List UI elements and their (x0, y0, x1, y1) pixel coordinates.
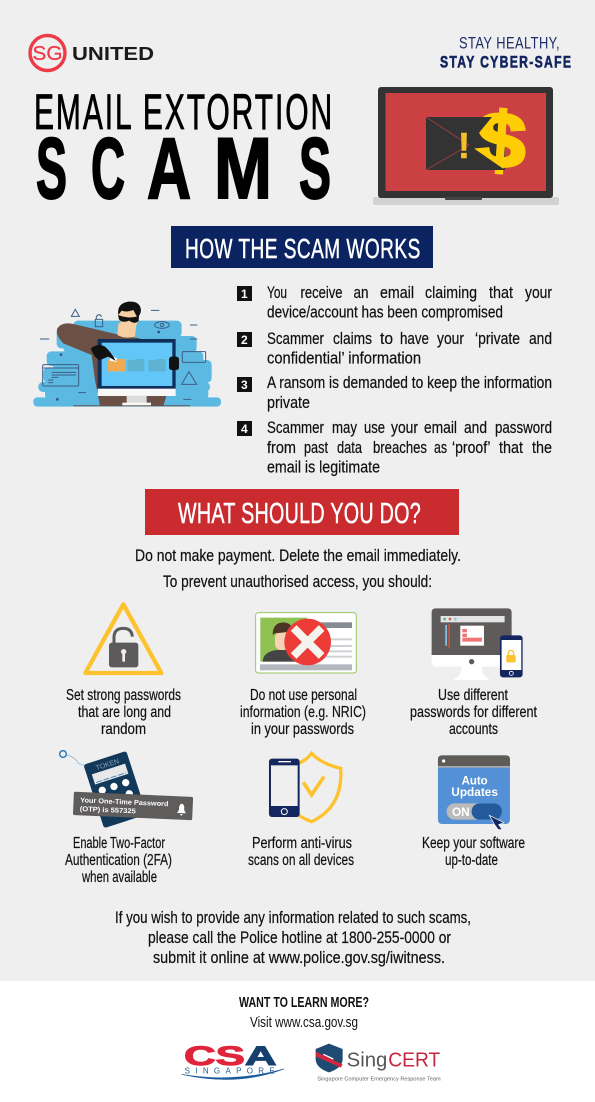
tip: different passwords: accounts (449, 721, 498, 738)
tip: no personal information: Do not use personal (250, 687, 357, 704)
step 2: and (529, 329, 552, 348)
title: EMAIL EXTORTION (34, 84, 332, 140)
logo: CSA Singapore: CS A (184, 1041, 277, 1071)
logo: SingCERT: CERT (388, 1048, 441, 1071)
step 1: claiming (425, 283, 477, 302)
step 2: ‘private (475, 329, 520, 348)
title: A (147, 121, 191, 217)
icon: token with OTP message: TOKEN (95, 758, 120, 772)
intro text: To prevent unauthorised access, you should: (163, 572, 432, 591)
footer text: WANT TO LEARN MORE? (239, 995, 369, 1011)
step 4: data (337, 438, 362, 457)
title: C (91, 121, 125, 217)
step 1: email (380, 283, 414, 302)
logo: CSA Singapore: SINGAPORE (185, 1067, 275, 1076)
step 4: password (495, 418, 552, 437)
tip: strong passwords: that are long and (78, 704, 171, 721)
tagline: STAY CYBER-SAFE (440, 54, 571, 72)
icon: token with OTP message (60, 751, 193, 828)
step 1 (237, 283, 552, 322)
step 1: You (267, 283, 287, 302)
title (34, 84, 332, 217)
step 2: confidential’ information (267, 348, 421, 368)
footer panel (0, 981, 595, 1102)
step 4: and (464, 418, 487, 437)
step 1: 1 (241, 287, 248, 301)
intro text: Do not make payment. Delete the email immediately. (135, 546, 461, 565)
step 1: receive (300, 283, 342, 302)
footer text (239, 995, 369, 1031)
icon: phone and shield (269, 753, 341, 822)
tip: software updates (422, 755, 525, 869)
step 1: device/account has been compromised (267, 302, 503, 322)
police hotline text (115, 908, 471, 967)
tip: no personal information: in your passwords (251, 721, 354, 738)
tip: software updates: Keep your software (422, 835, 525, 852)
tip: strong passwords: random (101, 721, 146, 738)
logo: SG United: UNITED (72, 44, 154, 64)
heading: what should you do: WHAT SHOULD YOU DO? (178, 498, 421, 530)
heading: how the scam works (171, 226, 433, 268)
tip: two-factor authentication (60, 751, 193, 886)
step 2: to (380, 329, 393, 348)
tip: strong passwords (66, 604, 181, 738)
step 4: email is legitimate (267, 458, 380, 476)
small floating icons (40, 309, 206, 399)
step 4: the (532, 438, 552, 457)
title: S (299, 121, 331, 217)
icon: laptop with ransom email (373, 87, 559, 205)
step 4: that (499, 438, 523, 457)
icon: ID card with red cross (256, 613, 356, 673)
step 4: Scammer (267, 418, 324, 437)
icon: token with OTP message: Your One-Time Password (80, 797, 169, 808)
tip: different passwords: passwords for different (410, 704, 538, 721)
steps list (237, 283, 552, 476)
icon: token with OTP message: (OTP) is 557325 (80, 806, 136, 815)
icon: auto updates toggle: ON (452, 805, 470, 819)
tip: no personal information: information (e.g. NRIC) (240, 704, 366, 721)
tip: no personal information (240, 613, 366, 738)
tip: two-factor authentication: when available (81, 869, 157, 886)
step 3 (237, 373, 552, 412)
tip: anti-virus: scans on all devices (248, 852, 354, 869)
tip: different passwords: Use different (438, 687, 509, 704)
tagline: STAY HEALTHY, (459, 35, 560, 53)
icon: monitor and phone (432, 608, 523, 680)
icon: auto updates toggle: Updates (451, 785, 498, 799)
step 2: claims (333, 329, 372, 348)
step 1: an (354, 283, 368, 302)
tip: different passwords (410, 608, 538, 738)
logo: SG United: SG (32, 43, 62, 65)
step 3: private (267, 393, 310, 412)
step 4: use (364, 418, 385, 437)
step 2: 2 (241, 333, 248, 347)
tip: anti-virus: Perform anti-virus (252, 835, 352, 852)
police hotline text: please call the Police hotline at 1800-255-0000 or (148, 928, 451, 947)
tip: software updates: up-to-date (445, 852, 498, 869)
icon: warning triangle with padlock (85, 604, 161, 673)
title: M (214, 121, 272, 217)
step 4: ‘proof’ (452, 438, 490, 457)
tagline (440, 35, 571, 72)
illustration: hacker at computer (33, 302, 221, 407)
icon: auto updates toggle: Auto (462, 773, 488, 787)
computer (98, 339, 176, 389)
icon: laptop with ransom email: ! (458, 125, 470, 166)
step 3: 3 (241, 378, 248, 392)
step 1: your (525, 283, 552, 302)
step 4: past (304, 438, 328, 457)
icon: laptop with ransom email: $ (473, 94, 529, 186)
police hotline text: submit it online at www.police.gov.sg/iwitness. (153, 948, 445, 967)
intro text (135, 546, 461, 591)
logo: SG United (30, 36, 154, 70)
logo: SingCERT: Sing (347, 1048, 387, 1071)
tip: two-factor authentication: Enable Two-Factor (73, 835, 165, 852)
hacker body (57, 323, 167, 406)
step 2: your (437, 329, 464, 348)
step 4 (237, 418, 552, 476)
icon: auto updates toggle (438, 755, 510, 830)
step 4: breaches (373, 438, 427, 457)
step 4: may (332, 418, 357, 437)
title: S (36, 121, 67, 217)
step 4: from (267, 438, 296, 457)
step 4: your (391, 418, 418, 437)
step 4: email (424, 418, 457, 437)
police hotline text: If you wish to provide any information related to such scams, (115, 908, 471, 927)
logo: SingCERT: Singapore Computer Emergency Response Team (317, 1077, 441, 1083)
step 2: Scammer (267, 329, 324, 348)
step 4: as (434, 438, 447, 457)
tip: strong passwords: Set strong passwords (66, 687, 181, 704)
tip: two-factor authentication: Authentication (2FA) (65, 852, 172, 869)
logo: SingCERT (316, 1044, 441, 1083)
step 2 (237, 329, 552, 368)
step 4: 4 (241, 422, 248, 436)
footer text: Visit www.csa.gov.sg (250, 1014, 358, 1031)
logo: CSA Singapore (182, 1041, 284, 1079)
heading: how the scam works: HOW THE SCAM WORKS (185, 233, 420, 265)
step 2: have (400, 329, 429, 348)
tip: anti-virus (248, 753, 354, 869)
step 1: that (489, 283, 513, 302)
heading: what should you do (145, 489, 459, 535)
